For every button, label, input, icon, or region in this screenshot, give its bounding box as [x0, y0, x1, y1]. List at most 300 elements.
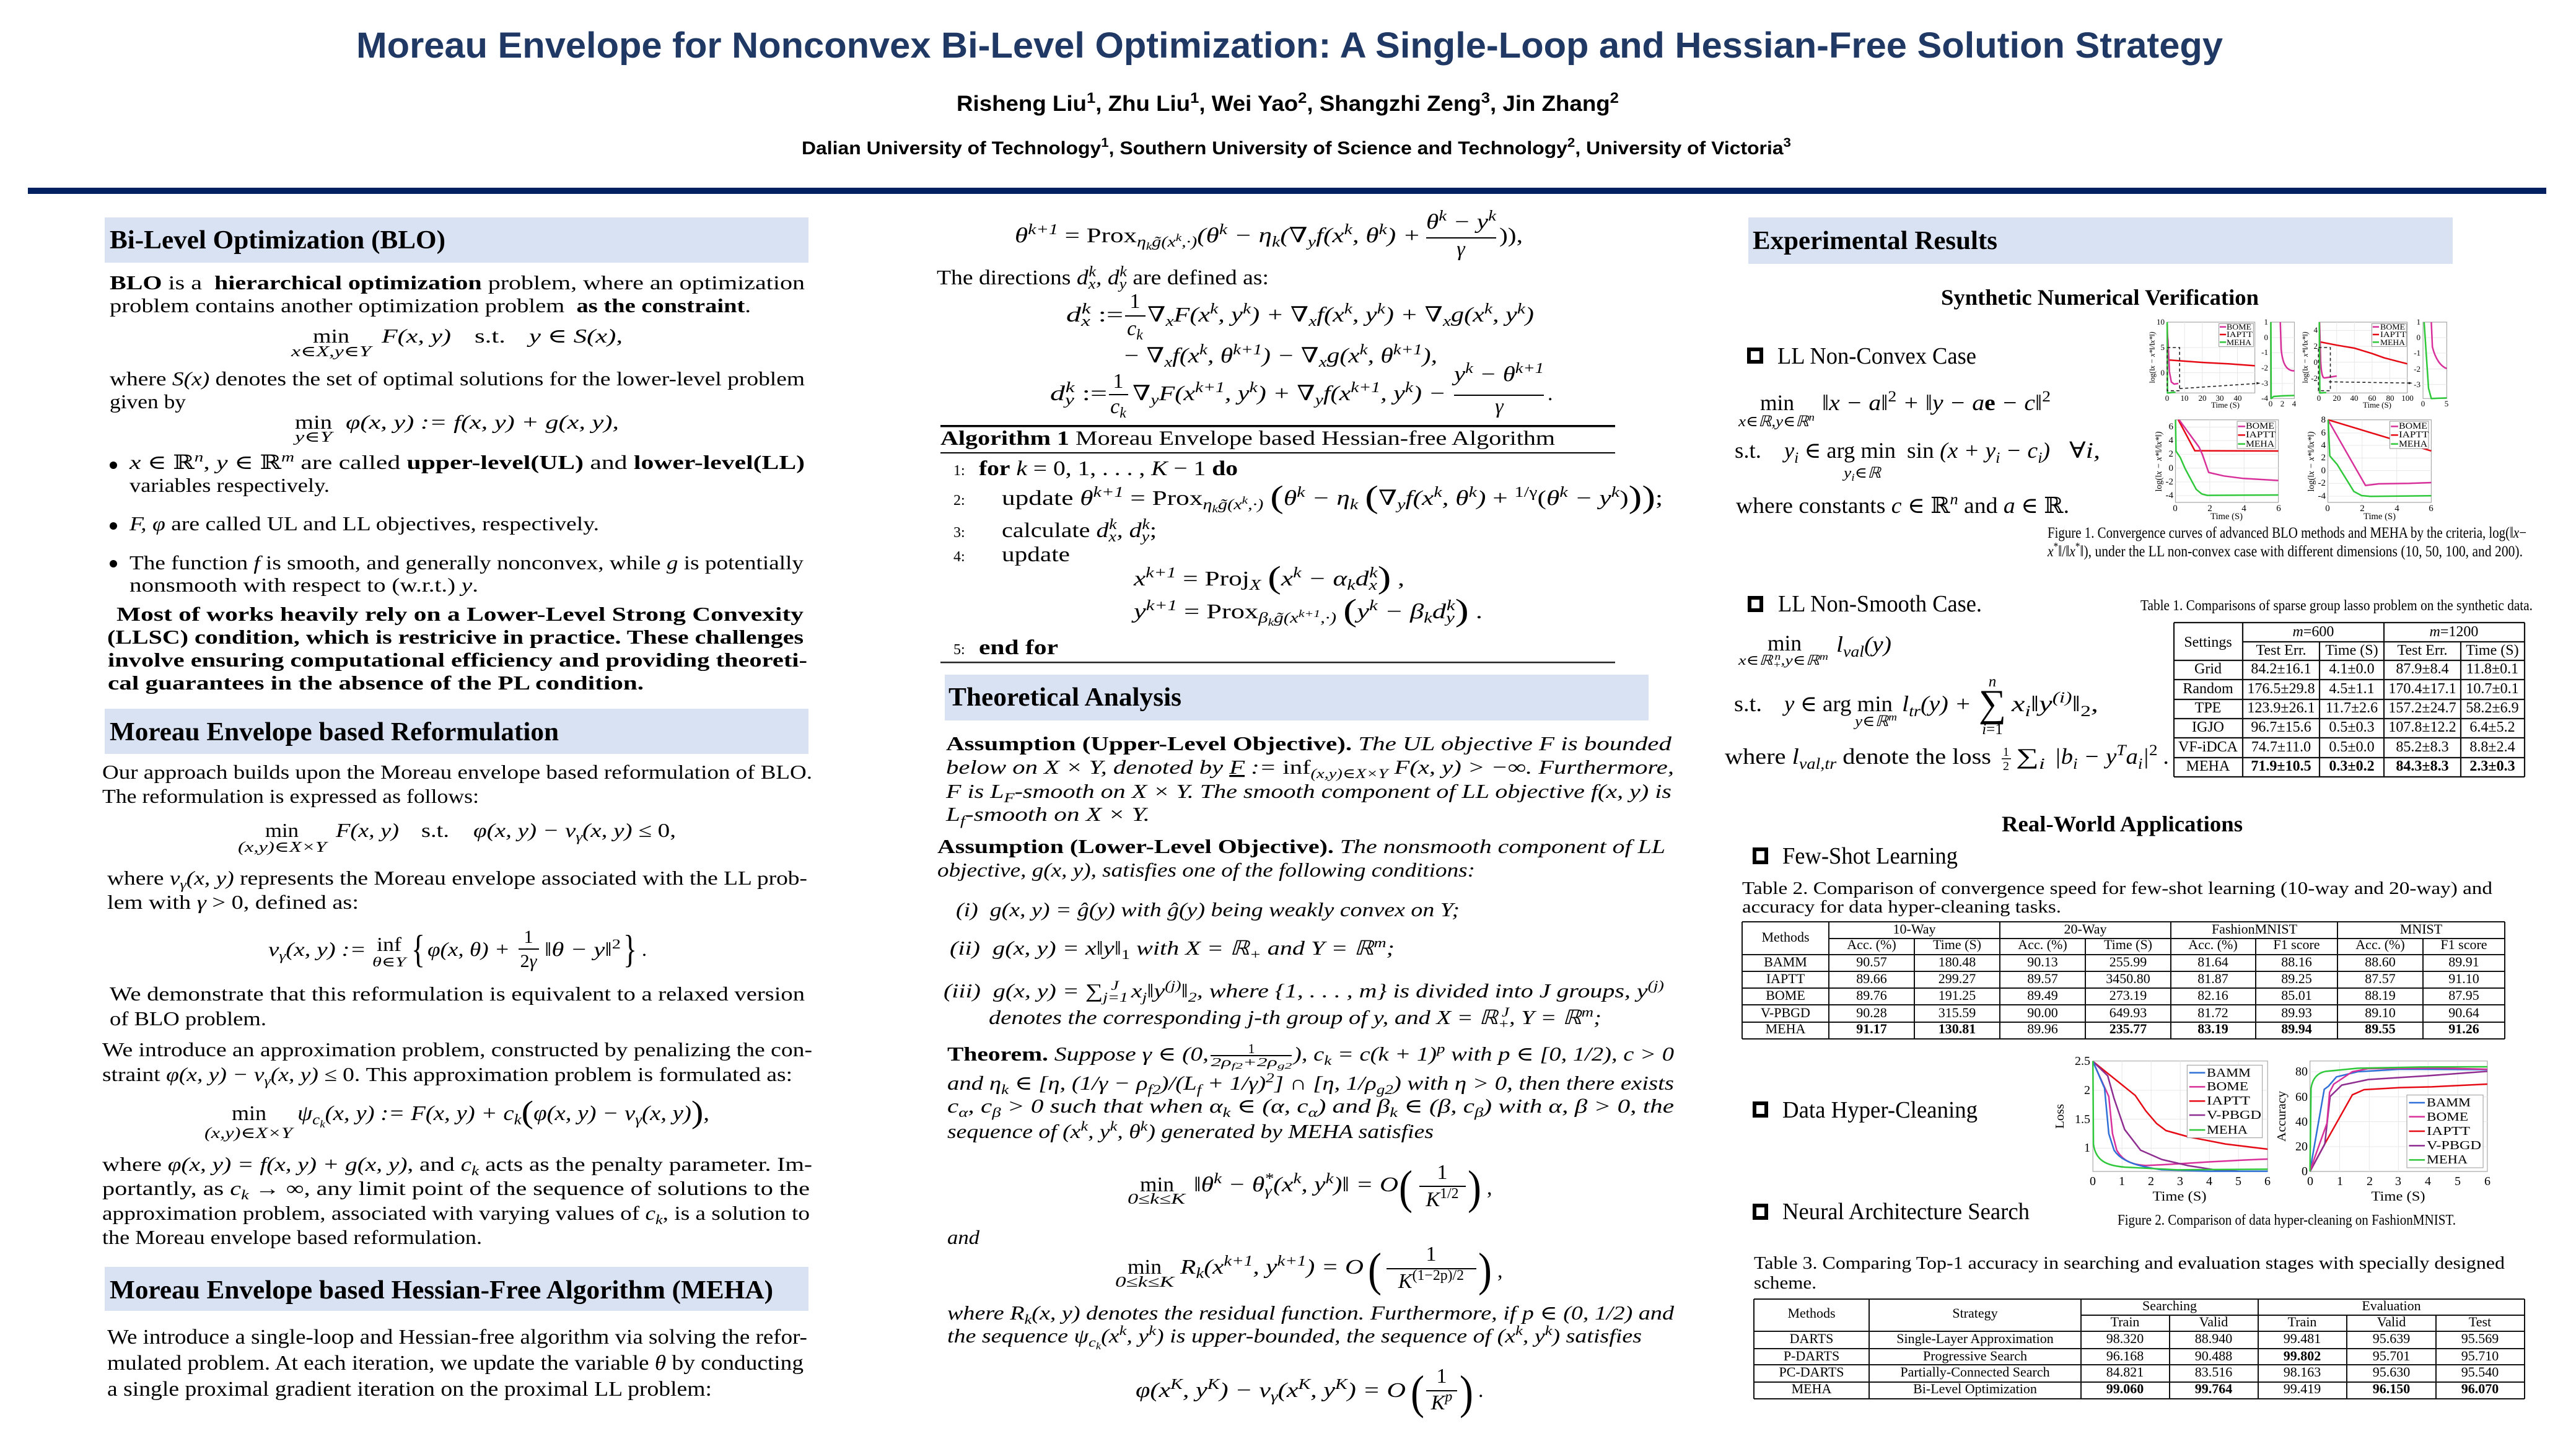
chart B: dimension 50: 100: [2401, 393, 2414, 403]
figure 2: data hyper-cleaning charts: [2053, 1054, 2491, 1228]
chart: loss vs time: 2.5: [2075, 1054, 2090, 1068]
table 1: Random: [2183, 681, 2233, 697]
formula: theta update: γ: [1457, 238, 1466, 261]
chart C: dimension 100: BOME: [2246, 421, 2274, 431]
bullet list: F, φ are called UL and LL objectives, respectively.: [129, 512, 599, 535]
text: LLSC challenges: cal guarantees in the absence of the PL condition.: [108, 672, 644, 694]
chart: loss vs time: MEHA: [2207, 1123, 2248, 1137]
chart: loss vs time: 5: [2235, 1175, 2241, 1188]
table 2: BOME: [1766, 987, 1805, 1003]
formula: direction definitions: − ∇ xf(x k, θ k+1 ) − ∇ xg(x k, θ k+1 ),: [1123, 342, 1437, 370]
formula: non-convex problem: where constants c ∈ ℝn and a ∈ ℝ.: [1736, 491, 2069, 518]
chart A: dimension 10: IAPTT: [2227, 330, 2253, 339]
formula: direction definitions: ∇xF(x k, y k) + ∇ xf(x k, y k) + ∇ xg(x k, y k): [1147, 301, 1534, 330]
caption: table 2: accuracy for data hyper-cleaning tasks.: [1742, 898, 2061, 917]
chart A: dimension 10: 30: [2215, 393, 2224, 403]
table 2: BAMM: [1764, 954, 1807, 970]
chart A: dimension 10: MEHA: [2227, 338, 2252, 347]
chart: loss vs time: 2: [2148, 1175, 2154, 1188]
text: approximation problem: We introduce an approximation problem, constructed by penalizing the con-: [102, 1038, 812, 1061]
header divider bar: [28, 188, 2546, 194]
chart: loss vs time: Loss: [2053, 1104, 2067, 1129]
text: theorem statement: ), c k = c(k + 1) p with p ∈ [0, 1/2), c > 0: [1292, 1041, 1674, 1068]
table 1: 8.8±2.4: [2469, 739, 2515, 755]
formula: penalized problem: min: [232, 1102, 266, 1125]
panel: Theoretical Analysis: [937, 675, 1675, 1419]
table 2: 90.64: [2448, 1005, 2479, 1020]
panel: Bi-Level Optimization: [105, 217, 808, 694]
text: approximation problem: [102, 1038, 812, 1088]
inset A: -3: [2261, 379, 2268, 388]
bullet list: nonsmooth with respect to (w.r.t.) y.: [129, 574, 478, 596]
formula: direction definitions: γ: [1495, 395, 1504, 418]
formula: non-smooth problem: |bi − yTai|2 .: [2054, 742, 2170, 773]
inset A: 0: [2269, 399, 2272, 408]
formula: theta update: θk − y k: [1426, 208, 1497, 234]
chart D: dimension 200: 2: [2360, 504, 2365, 514]
table 2: F1 score: [2440, 937, 2487, 952]
algorithm steps: calculate dxk, d yk;: [1002, 517, 1157, 545]
chart B: dimension 50: -2: [2311, 374, 2318, 383]
chart A: dimension 10: 0: [2161, 368, 2165, 377]
chart: accuracy vs time: Time (S): [2372, 1188, 2425, 1204]
heading: reformulation: Moreau Envelope based Reformulation: [110, 718, 559, 746]
inset A: -1: [2261, 348, 2268, 357]
table 1: 4.5±1.1: [2329, 681, 2375, 697]
formula: non-convex problem: [1735, 388, 2100, 518]
table 2: V-PBGD: [1761, 1005, 1810, 1020]
table 3: P-DARTS: [1784, 1348, 1839, 1364]
chart: loss vs time: 4: [2206, 1175, 2212, 1188]
formula: non-convex problem: ‖x − a‖ 2 + ‖y − a e − c‖ 2: [1822, 388, 2051, 415]
algorithm steps: 5:: [953, 642, 965, 658]
algorithm steps: update θk+1 = Prox ηkg̃(x k,·) (θk − η k (∇ yf(x k, θ k) + 1/γ(θk − y k))) ;: [1002, 480, 1663, 515]
text: directions: The directions dxk, dyk are defined as:: [937, 264, 1269, 292]
chart A: dimension 10: BOME: [2227, 322, 2251, 331]
formula: residual rate: K(1−2p)/2: [1398, 1267, 1464, 1293]
table 1: Test Err.: [2398, 642, 2447, 659]
table 2: 83.19: [2197, 1021, 2228, 1036]
chart: accuracy vs time: 3: [2395, 1175, 2401, 1188]
chart D: dimension 200: log(‖x − x*‖/‖x*‖): [2307, 431, 2316, 492]
algorithm steps: 4:: [953, 549, 965, 565]
chart C: dimension 100: -4: [2166, 491, 2173, 501]
table 2: Acc. (%): [2188, 937, 2238, 952]
formula: non-smooth problem: x∈ℝ +n,y∈ℝ m: [1738, 652, 1828, 670]
inset A: 0: [2264, 333, 2268, 342]
table 1: Time (S): [2325, 642, 2378, 659]
chart A: dimension 10: 40: [2234, 393, 2241, 403]
table 3: Progressive Search: [1923, 1348, 2027, 1364]
text: upper-level assumption: below on X × Y, denoted by F := inf (x,y)∈X×Y F(x, y) > −∞. Furthermore,: [946, 756, 1674, 781]
chart D: dimension 200: 6: [2429, 504, 2434, 514]
chart B: dimension 50: BOME: [2380, 322, 2405, 331]
caption: table 3: Table 3. Comparing Top-1 accuracy in searching and evaluation stages with specially designed: [1754, 1254, 2505, 1273]
chart: loss vs time: 2: [2084, 1083, 2090, 1097]
formula: non-smooth problem: s.t.: [1734, 691, 1762, 716]
caption: figure 1: [2047, 525, 2526, 560]
table 2: 299.27: [1939, 971, 1976, 986]
chart B: dimension 50: 40: [2350, 393, 2358, 403]
formula: direction definitions: .: [1548, 382, 1553, 405]
formula: non-smooth problem: lval(y): [1836, 632, 1891, 660]
chart: loss vs time: 3: [2177, 1175, 2183, 1188]
caption: table 3: [1754, 1254, 2505, 1293]
formula: non-convex problem: ∀i,: [2069, 438, 2100, 463]
table 2: 89.25: [2281, 971, 2312, 986]
formula: Moreau envelope: θ∈Y: [372, 954, 408, 970]
formula: Moreau envelope: vγ(x, y) :=: [268, 938, 366, 963]
chart C: dimension 100: 4: [2241, 504, 2246, 514]
chart C: dimension 100: IAPTT: [2246, 430, 2276, 440]
formula: convergence of theta: ‖θk − θ γ*(xk, y k)‖ = O: [1194, 1171, 1398, 1199]
table 1: 2.3±0.3: [2469, 758, 2515, 774]
text: theorem statement: Theorem. Suppose γ ∈ (0,: [947, 1043, 1209, 1065]
table 2: F1 score: [2273, 937, 2320, 952]
text: MEHA intro: a single proximal gradient iteration on the proximal LL problem:: [107, 1378, 712, 1401]
chart C: dimension 100: Time (S): [2210, 512, 2243, 522]
table 1: 87.9±8.4: [2396, 661, 2449, 677]
text: upper-level assumption: [945, 732, 1674, 828]
table 2: 91.17: [1856, 1021, 1887, 1036]
table 2: MEHA: [1766, 1021, 1805, 1036]
table 2: Acc. (%): [2018, 937, 2067, 952]
chart C: dimension 100: -2: [2166, 477, 2173, 487]
section: LL non-convex case: [1735, 343, 2100, 518]
inset A: 1: [2264, 317, 2268, 326]
heading: MEHA: Moreau Envelope based Hessian-Free Algorithm (MEHA): [110, 1276, 773, 1305]
formula: theta update: θk+1 = Prox ηkg̃(x k,·)(θ k − η k(∇ yf(x k, θ k) +: [1015, 222, 1421, 252]
chart: loss vs time: 1: [2084, 1141, 2090, 1155]
caption: figure 2: Figure 2. Comparison of data hyper-cleaning on FashionMNIST.: [2118, 1212, 2456, 1228]
heading: experimental results: [1748, 217, 2453, 264]
table 2: 81.72: [2197, 1005, 2228, 1020]
algorithm steps: update: [1002, 543, 1070, 566]
formula: feasibility rate: (: [1411, 1367, 1424, 1419]
text: lower-level assumption: (i) g(x, y) = ĝ(y) with ĝ(y) being weakly convex on Y;: [956, 898, 1460, 921]
text: theorem statement: cα, c β > 0 such that when α k ∈ (α, c α) and β k ∈ (β, c β) with α, β > 0, the: [947, 1095, 1674, 1120]
table 2: 273.19: [2109, 987, 2147, 1003]
table 3: Single-Layer Approximation: [1896, 1331, 2054, 1346]
chart C: dimension 100: 6: [2168, 422, 2173, 432]
text: theorem statement: 1: [1248, 1041, 1255, 1056]
formula: convergence of theta: K1/2: [1425, 1186, 1459, 1211]
table 3: Bi-Level Optimization: [1913, 1381, 2037, 1396]
caption: table 2: [1742, 879, 2492, 917]
table 1: TPE: [2195, 700, 2221, 716]
formula: feasibility rate: ): [1460, 1367, 1473, 1419]
text: penalty explanation: where φ(x, y) = f(x, y) + g(x, y) , and ck acts as the penalty parameter. Im-: [102, 1153, 812, 1178]
table 2: 235.77: [2109, 1021, 2147, 1036]
table 2: 10-Way: [1893, 921, 1936, 937]
text: equivalence statement: [110, 983, 805, 1030]
table 3: Partially-Connected Search: [1900, 1364, 2050, 1380]
chart: accuracy vs time: V-PBGD: [2427, 1139, 2481, 1152]
text: approximation problem: straint φ(x, y) − v γ(x, y) ≤ 0. This approximation problem is formulated as:: [102, 1063, 792, 1088]
table 1: 176.5±29.8: [2247, 681, 2315, 697]
chart D: dimension 200: [2307, 415, 2434, 522]
chart C: dimension 100: 2: [2168, 449, 2173, 459]
chart: loss vs time: IAPTT: [2207, 1094, 2250, 1108]
bullet list: variables respectively.: [129, 474, 330, 496]
chart A: dimension 10: 5: [2161, 343, 2165, 352]
text: and: and: [947, 1226, 980, 1248]
table 3: 98.320: [2106, 1331, 2144, 1346]
formula: reformulation: (x,y)∈X×Y: [238, 839, 329, 856]
text: LLSC challenges: (LLSC) condition, which is restricive in practice. These challenges: [107, 626, 804, 648]
formula: non-smooth problem: y ∈ arg min: [1782, 691, 1893, 716]
formula: non-convex problem: x∈ℝ,y∈ℝ n: [1738, 411, 1815, 430]
chart B: dimension 50: IAPTT: [2380, 330, 2406, 339]
chart B: dimension 50: MEHA: [2380, 338, 2406, 347]
table 1: 107.8±12.2: [2388, 719, 2456, 735]
section: neural architecture search label: Neural Architecture Search: [1782, 1199, 2030, 1225]
table 2: [1742, 921, 2505, 1039]
chart: loss vs time: 6: [2264, 1175, 2271, 1188]
chart: accuracy vs time: 4: [2425, 1175, 2431, 1188]
text: upper-level assumption: Assumption (Upper-Level Objective). The UL objective F is bounded: [946, 732, 1672, 755]
table 2: 87.57: [2365, 971, 2396, 986]
table 2: 130.81: [1939, 1021, 1976, 1036]
table 1: 10.7±0.1: [2466, 681, 2519, 697]
inset A: 4: [2292, 399, 2297, 408]
text: lower-level description: where S(x) denotes the set of optimal solutions for the lower-level problem: [110, 367, 805, 390]
chart: accuracy vs time: BOME: [2427, 1110, 2468, 1124]
table 3: Evaluation: [2362, 1298, 2421, 1313]
bullet list: The function f is smooth, and generally nonconvex, while g is potentially: [129, 551, 804, 574]
formula: direction definitions: 1: [1113, 370, 1124, 393]
inset B: 0: [2421, 399, 2425, 408]
formula: reformulation: F(x, y): [335, 819, 399, 841]
formula: lower-level problem: φ(x, y) := f(x, y) + g(x, y),: [346, 411, 619, 433]
table 2: FashionMNIST: [2212, 921, 2298, 937]
table 3: 95.701: [2373, 1348, 2410, 1364]
table 1: 0.5±0.0: [2329, 739, 2375, 755]
table 2: 90.00: [2027, 1005, 2058, 1020]
formula: penalized problem: [204, 1095, 709, 1142]
table 2: 3450.80: [2106, 971, 2150, 986]
formula: direction definitions: d xk :=: [1066, 301, 1123, 330]
formula: feasibility rate: φ(x K, y K) − v γ(x K, y K) = O: [1136, 1377, 1406, 1405]
chart D: dimension 200: Time (S): [2364, 512, 2396, 522]
table 3: Train: [2288, 1314, 2316, 1329]
table 1: 11.8±0.1: [2466, 661, 2518, 677]
algorithm steps: 3:: [953, 525, 965, 541]
algorithm heading: Algorithm 1 Moreau Envelope based Hessian-free Algorithm: [940, 427, 1555, 450]
table 1: IGJO: [2192, 719, 2224, 735]
formula: Moreau envelope: 1: [524, 927, 533, 947]
table 3: 98.163: [2284, 1364, 2321, 1380]
table 3: Valid: [2199, 1314, 2228, 1329]
text: residual function: where R k(x, y) denotes the residual function. Furthermore, if p ∈ (0, 1/2) and: [947, 1302, 1675, 1327]
formula: direction definitions: [1050, 290, 1553, 421]
formula: reformulation: min: [265, 819, 299, 841]
chart A: dimension 10: 10: [2157, 317, 2165, 326]
heading: experimental results: Experimental Results: [1753, 227, 1997, 255]
chart: accuracy vs time: 60: [2295, 1090, 2308, 1104]
inset B: -3: [2414, 380, 2420, 389]
table 1: 74.7±11.0: [2251, 739, 2311, 755]
chart: accuracy vs time: 40: [2295, 1115, 2308, 1129]
algorithm steps: for k = 0, 1, . . . , K − 1 do: [979, 457, 1238, 480]
text: LLSC challenges: [107, 603, 807, 694]
chart: accuracy vs time: [2275, 1061, 2491, 1204]
bullet list: [110, 449, 805, 596]
formula: non-convex problem: yi ∈ arg min: [1782, 438, 1896, 466]
algorithm steps: end for: [979, 636, 1058, 659]
chart D: dimension 200: 4: [2321, 440, 2326, 450]
table 3: 95.630: [2373, 1364, 2410, 1380]
table 2: 90.28: [1856, 1005, 1887, 1020]
caption: table 3: scheme.: [1754, 1274, 1816, 1293]
table 2: 91.10: [2448, 971, 2479, 986]
formula: reformulation: [238, 819, 676, 856]
formula: convergence of theta: ): [1468, 1162, 1481, 1214]
formula: residual rate: (: [1368, 1244, 1382, 1296]
table 3: MEHA: [1792, 1381, 1831, 1396]
text: lower-level assumption: Assumption (Lower-Level Objective). The nonsmooth component of LL: [937, 835, 1665, 857]
table 1: 11.7±2.6: [2326, 700, 2378, 716]
formula: non-smooth problem: ltr(y) +: [1902, 691, 1971, 720]
table 1: 4.1±0.0: [2329, 661, 2375, 677]
chart: accuracy vs time: BAMM: [2427, 1096, 2471, 1110]
text: reformulation intro: Our approach builds upon the Moreau envelope based reformulation of BLO.: [102, 761, 812, 783]
table 2: 88.60: [2365, 954, 2396, 970]
formula: non-convex problem: sin (x + yi − ci): [1907, 438, 2050, 466]
chart A: dimension 10: Time (S): [2211, 400, 2240, 409]
text: BLO intro: BLO is a hierarchical optimization problem, where an optimization: [110, 271, 805, 294]
table 2: 180.48: [1939, 954, 1976, 970]
text: penalty explanation: the Moreau envelope based reformulation.: [102, 1226, 482, 1248]
chart: loss vs time: [2053, 1054, 2271, 1204]
formula: BLO problem: min: [313, 325, 349, 347]
heading: theoretical analysis: Theoretical Analysis: [948, 683, 1181, 712]
table 3: PC-DARTS: [1779, 1364, 1844, 1380]
table 3: 96.168: [2106, 1348, 2144, 1364]
heading: MEHA: [105, 1267, 808, 1311]
text: lower-level assumption: [937, 835, 1665, 1031]
chart B: dimension 50: Time (S): [2363, 400, 2391, 409]
chart D: dimension 200: 8: [2321, 415, 2326, 425]
formula: residual rate: 0≤k≤K: [1115, 1274, 1176, 1290]
text: lower-level assumption: (ii) g(x, y) = x‖y‖ 1 with X = ℝ + and Y = ℝ m;: [950, 935, 1395, 962]
table 3: Train: [2111, 1314, 2139, 1329]
text: reformulation intro: [102, 761, 812, 807]
formula: residual rate: 1: [1426, 1243, 1436, 1266]
table 2: 649.93: [2109, 1005, 2147, 1020]
formula: convergence of theta: 0≤k≤K: [1128, 1191, 1187, 1207]
formula: BLO problem: F(x, y): [381, 325, 451, 347]
table 2: 85.01: [2281, 987, 2312, 1003]
chart B: dimension 50: 0: [2313, 357, 2318, 367]
table 2: 89.10: [2365, 1005, 2396, 1020]
formula: non-smooth problem: xi‖y (i)‖2,: [2011, 689, 2098, 720]
chart D: dimension 200: 6: [2321, 428, 2326, 438]
table 3: 96.070: [2461, 1381, 2499, 1396]
table 2: 90.57: [1856, 954, 1887, 970]
table 3: 83.516: [2195, 1364, 2232, 1380]
chart D: dimension 200: -4: [2318, 491, 2326, 501]
table 1: Grid: [2194, 661, 2222, 677]
table 2: 88.16: [2281, 954, 2312, 970]
formula: reformulation: s.t.: [421, 819, 449, 841]
chart: loss vs time: 0: [2090, 1175, 2096, 1188]
text: penalty explanation: portantly, as ck → ∞, any limit point of the sequence of solutions to the: [102, 1177, 810, 1202]
text: theorem statement: [947, 1041, 1674, 1142]
chart C: dimension 100: [2154, 420, 2281, 522]
formula: residual rate: ,: [1497, 1259, 1503, 1282]
panel: MEHA algorithm intro: [105, 1267, 808, 1401]
text: BLO intro: problem contains another optimization problem as the constraint .: [110, 294, 751, 317]
text: upper-level assumption: F is L F-smooth on X × Y. The smooth component of LL objective f(x, y) is: [945, 780, 1671, 805]
chart B: dimension 50: 4: [2313, 325, 2318, 335]
table 3: 96.150: [2373, 1381, 2410, 1396]
inset B: 0: [2416, 333, 2420, 342]
formula: BLO problem: y ∈ S(x),: [527, 325, 623, 347]
chart D: dimension 200: -2: [2318, 478, 2326, 488]
chart D: dimension 200: MEHA: [2399, 439, 2427, 449]
text: Moreau envelope definition: lem with γ > 0, defined as:: [107, 891, 359, 913]
text: LLSC challenges: involve ensuring computational efficiency and providing theoreti-: [108, 649, 807, 671]
chart: loss vs time: BOME: [2207, 1080, 2248, 1093]
formula: direction definitions: ck: [1127, 317, 1143, 343]
table 2: 91.26: [2448, 1021, 2479, 1036]
algorithm steps: 2:: [953, 492, 965, 509]
text: BLO intro: [110, 271, 805, 317]
text: MEHA intro: [107, 1326, 807, 1401]
table 2: 82.16: [2197, 987, 2228, 1003]
table 3: 90.488: [2195, 1348, 2232, 1364]
inset B: [2414, 317, 2448, 408]
text: lower-level description: [110, 367, 805, 413]
formula: Moreau envelope: φ(x, θ) +: [427, 938, 510, 960]
formula: convergence of theta: 1: [1437, 1161, 1447, 1184]
chart A: dimension 10: 10: [2181, 393, 2188, 403]
table 2: MNIST: [2400, 921, 2443, 937]
chart: loss vs time: 1.5: [2075, 1113, 2090, 1126]
inset A: -4: [2261, 393, 2268, 403]
table 2: 89.55: [2365, 1021, 2396, 1036]
figure 1: convergence curves: [2047, 317, 2526, 560]
formula: residual rate: ): [1478, 1244, 1492, 1296]
table 2: 81.87: [2197, 971, 2228, 986]
formula: reformulation: φ(x, y) − v γ(x, y) ≤ 0,: [473, 819, 676, 844]
table 3: 99.481: [2284, 1331, 2321, 1346]
text: MEHA intro: We introduce a single-loop and Hessian-free algorithm via solving the refor-: [107, 1326, 807, 1349]
icon: checkbox: [1750, 598, 1761, 610]
text: Moreau envelope definition: where vγ(x, y) represents the Moreau envelope associated with the LL prob-: [107, 867, 807, 892]
formula: non-smooth problem: i=1: [1982, 721, 2003, 738]
formula: BLO problem: x∈X,y∈Y: [291, 344, 374, 360]
table 1: VF-iDCA: [2178, 739, 2238, 755]
label: LL Non-Smooth Case.: [1778, 591, 1982, 617]
text: penalty explanation: [102, 1153, 812, 1248]
text: theorem statement: and η k ∈ [η, (1/γ − ρ f2)/(L f + 1/γ) 2] ∩ [η, 1/ρ g2) with η > 0, then there exists: [947, 1070, 1674, 1097]
text: theorem statement: sequence of (x k, yk, θ k) generated by MEHA satisfies: [947, 1118, 1434, 1142]
formula: convergence of theta: (: [1399, 1162, 1413, 1214]
inset A: -2: [2261, 363, 2268, 372]
chart D: dimension 200: 2: [2321, 453, 2326, 463]
table 2: 89.57: [2027, 971, 2058, 986]
table 1: 170.4±17.1: [2388, 681, 2456, 697]
table 1: Settings: [2184, 634, 2232, 650]
affiliations: Dalian University of Technology 1, Southern University of Science and Technology 2, University of Victoria 3: [802, 136, 1791, 159]
table 2: Acc. (%): [1847, 937, 1896, 952]
formula: non-smooth problem: min: [1768, 631, 1802, 655]
formula: Moreau envelope: .: [642, 938, 647, 960]
table 3: 95.540: [2461, 1364, 2499, 1380]
formula: non-smooth problem: [1725, 631, 2170, 773]
